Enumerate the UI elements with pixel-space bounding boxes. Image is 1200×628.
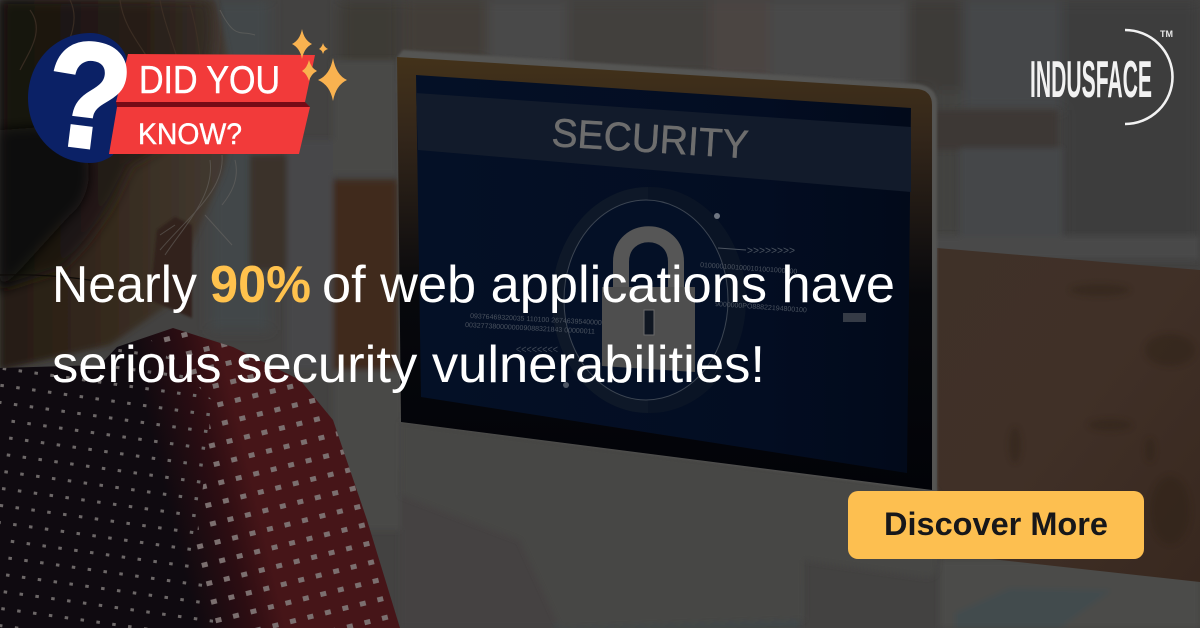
did you text: DID YOU bbox=[139, 59, 280, 102]
know text: KNOW? bbox=[138, 118, 242, 151]
padlock graphic: 09376469320035 110100 2674639540000 bbox=[470, 313, 602, 327]
button: discover more: Discover More bbox=[884, 506, 1108, 542]
padlock graphic: 9000000PO88822194800100 bbox=[715, 301, 807, 314]
padlock graphic: 0032773800000009088321843 00000011 bbox=[465, 322, 595, 336]
headline: of web applications have bbox=[322, 256, 895, 314]
button: discover more bbox=[848, 491, 1144, 559]
screen title: SECURITY bbox=[550, 111, 750, 167]
monitor bezel bbox=[397, 57, 932, 490]
padlock graphic bbox=[465, 187, 866, 413]
padlock graphic: <<<<<<<< bbox=[516, 344, 558, 356]
banner fold bbox=[116, 102, 310, 107]
logo arc bbox=[1125, 30, 1172, 124]
monitor screen bbox=[416, 75, 911, 473]
banner: did you bbox=[116, 54, 315, 102]
wood panel right bbox=[937, 248, 1200, 582]
screen header band bbox=[416, 93, 911, 192]
logo: indusface bbox=[1030, 29, 1173, 124]
monitor chin and stand bbox=[408, 464, 798, 615]
headline bbox=[52, 256, 895, 394]
headline: Nearly bbox=[52, 256, 197, 314]
headline: 90% bbox=[210, 256, 311, 314]
icon: navy question disc bbox=[28, 33, 128, 163]
icon: question mark: ? bbox=[36, 8, 140, 184]
padlock graphic: >>>>>>>> bbox=[747, 245, 795, 257]
monitor frame bbox=[397, 50, 937, 492]
woman's hair and neck bbox=[0, 0, 255, 370]
trademark: TM bbox=[1160, 29, 1173, 39]
banner: know bbox=[109, 107, 310, 154]
woman's shirt bbox=[0, 320, 420, 628]
icon: sparkles bbox=[292, 29, 347, 101]
padlock graphic: 0100001001000101001000000 bbox=[700, 262, 798, 276]
headline: serious security vulnerabilities! bbox=[52, 336, 765, 394]
badge: did you know bbox=[28, 8, 347, 184]
